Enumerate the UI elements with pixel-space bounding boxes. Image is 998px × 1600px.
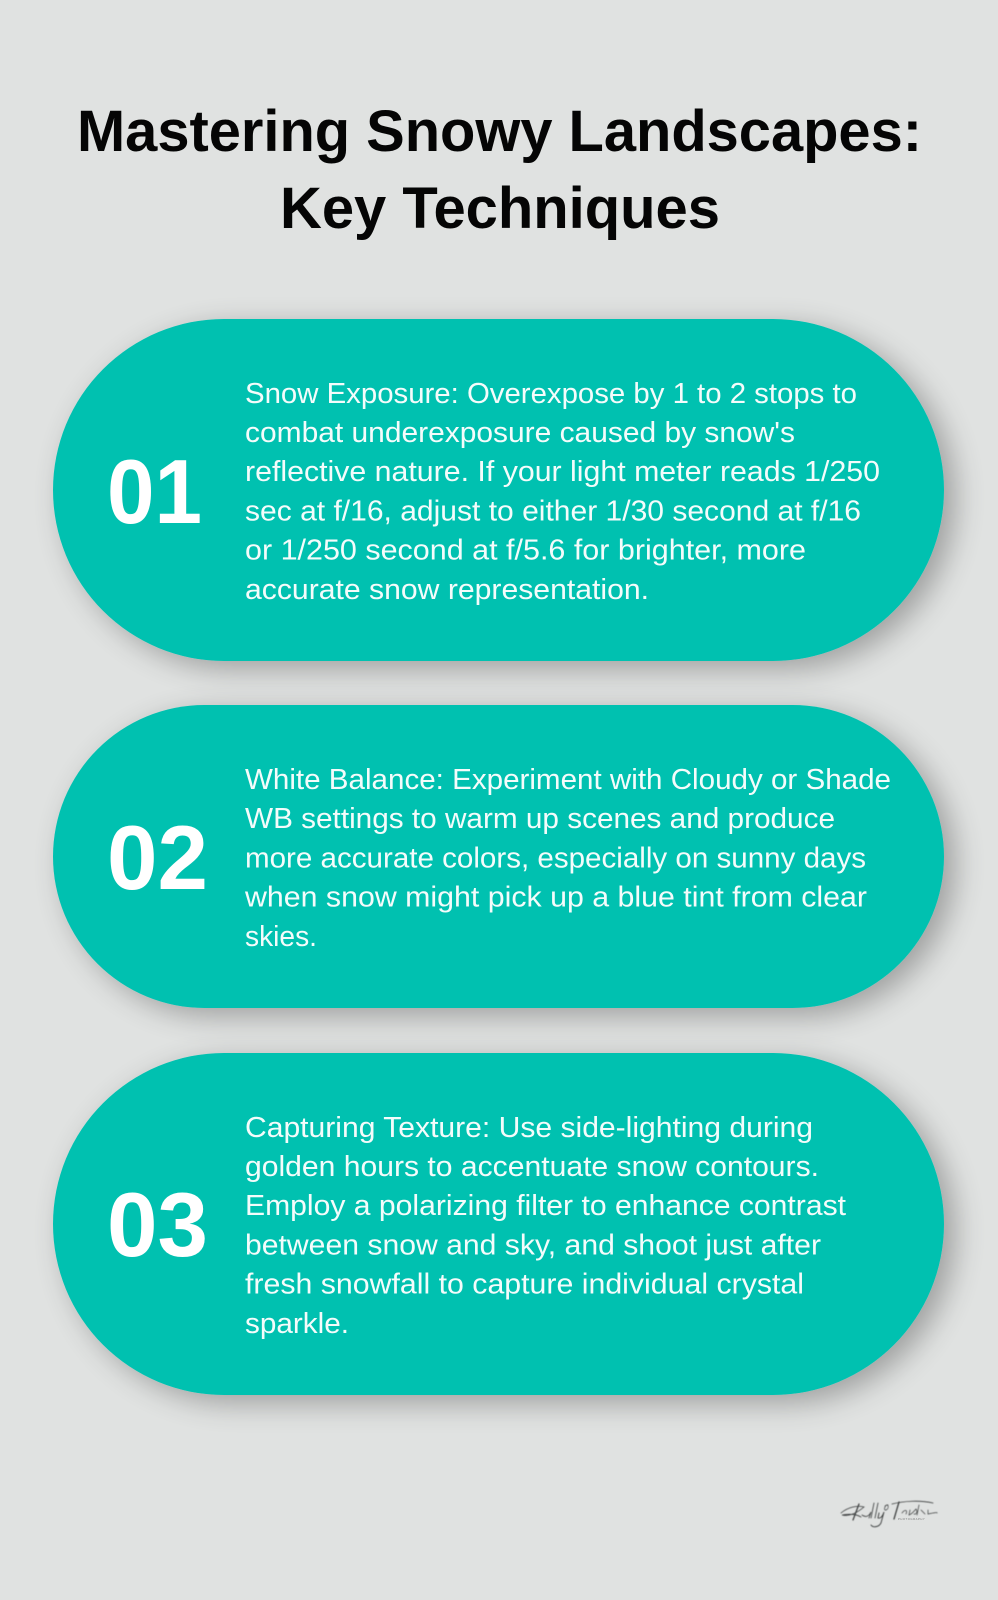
text: capturing texture: golden hours to accentuate snow contours. [245,1151,819,1183]
text: capturing texture: sparkle. [245,1308,349,1340]
text: capturing texture: Capturing Texture: Use side-lighting during [245,1112,813,1144]
text: snow exposure: Snow Exposure: Overexpose by 1 to 2 stops to [245,378,857,410]
text: capturing texture: Employ a polarizing filter to enhance contrast [245,1190,846,1222]
logo: signature [841,1501,937,1527]
text: snow exposure: combat underexposure caused by snow's [245,417,795,449]
text: capturing texture [245,1112,846,1340]
text: snow exposure: reflective nature. If your light meter reads 1/250 [245,456,880,488]
pill background 01 [53,319,944,661]
text: white balance: more accurate colors, especially on sunny days [245,842,866,874]
pill background 03 [53,1053,944,1395]
text: white balance: WB settings to warm up scenes and produce [245,803,835,835]
title: Key Techniques [280,176,720,241]
pill background 02 [53,705,944,1008]
panel: snow exposure [53,319,944,661]
text: white balance: skies. [245,921,317,953]
text: snow exposure: accurate snow representation. [245,574,649,606]
panel: capturing texture [53,1053,944,1395]
text: snow exposure: or 1/250 second at f/5.6 for brighter, more [245,534,806,566]
title: Mastering Snowy Landscapes: [77,99,922,164]
text: snow exposure: sec at f/16, adjust to either 1/30 second at f/16 [245,496,861,528]
text: white balance: White Balance: Experiment with Cloudy or Shade [245,764,891,796]
text: white balance [244,764,891,953]
number 01: 01 [107,442,202,543]
number 03: 03 [107,1175,208,1276]
panel: white balance [53,705,944,1008]
text: white balance: when snow might pick up a blue tint from clear [244,882,868,914]
text: capturing texture: fresh snowfall to capture individual crystal [245,1268,804,1300]
text: snow exposure [245,378,880,606]
logo: signature: PHOTOGRAPHY [898,1517,925,1521]
title [77,99,922,241]
number 02: 02 [107,808,208,909]
text: capturing texture: between snow and sky, and shoot just after [245,1230,821,1262]
